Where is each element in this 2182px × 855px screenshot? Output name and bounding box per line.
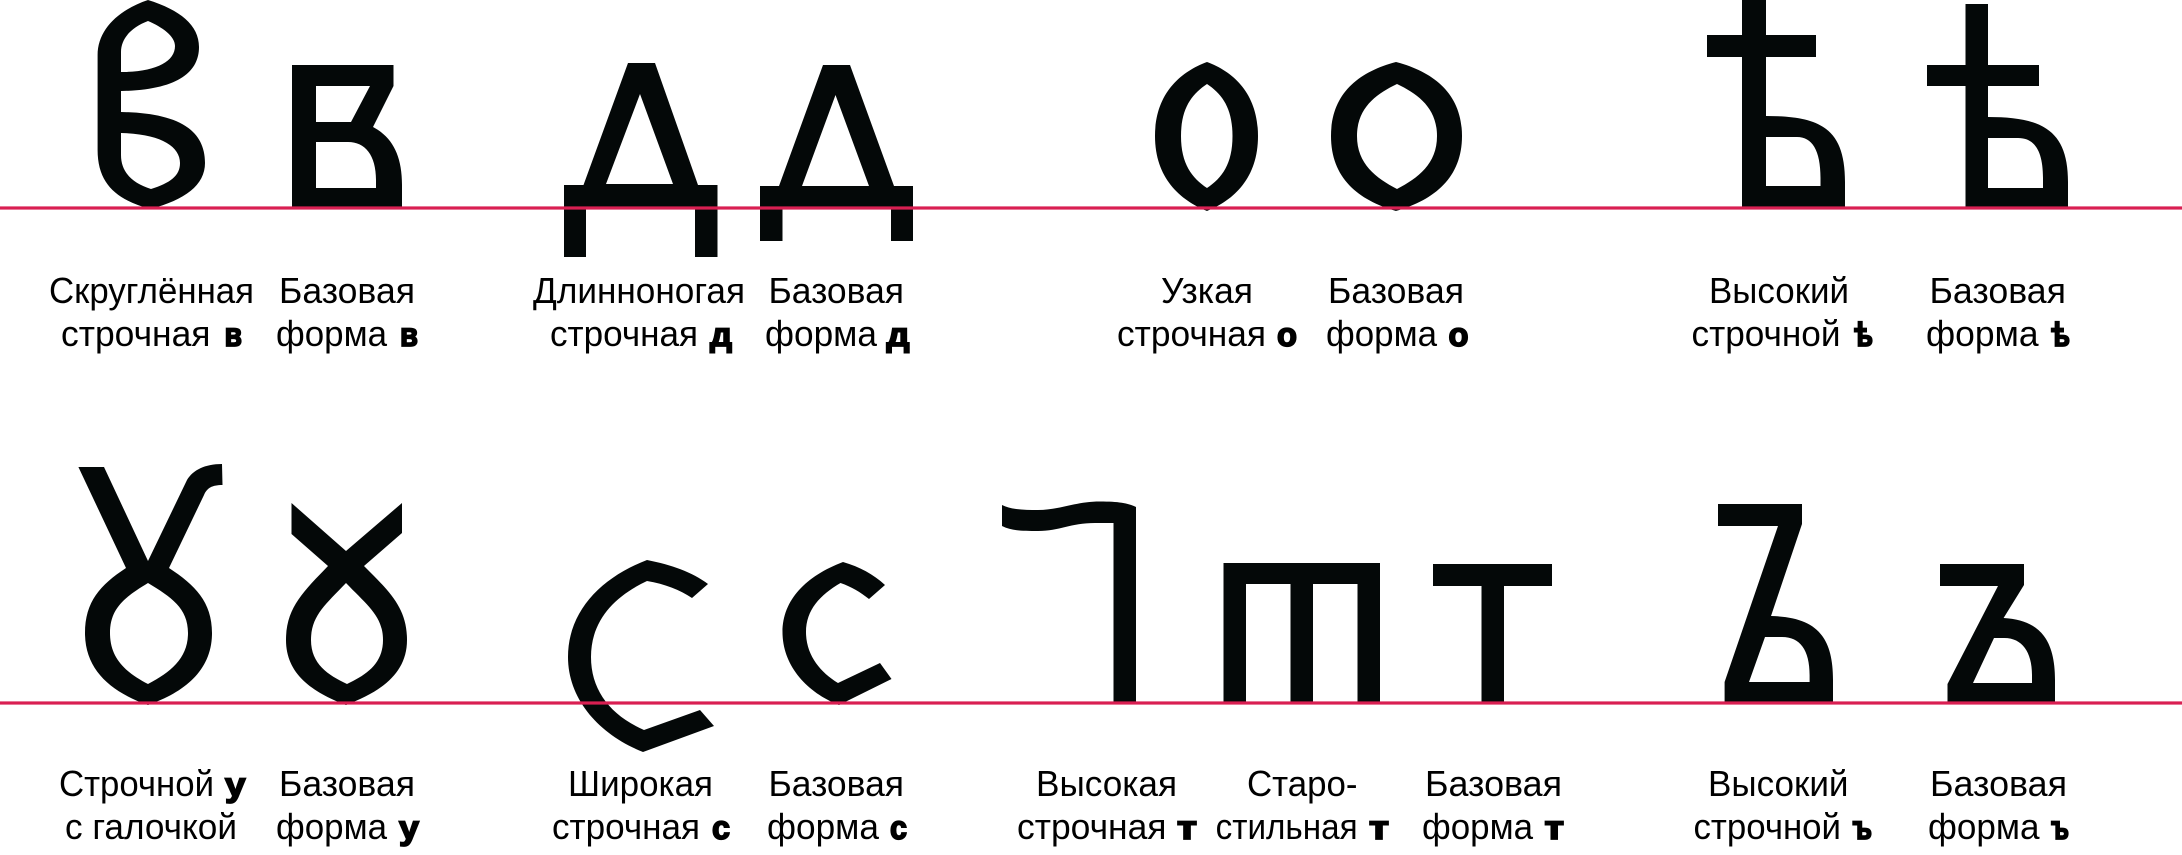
glyph: tall ъ: [1718, 504, 1833, 702]
caption: base ѣ: Базовая: [1930, 270, 2066, 311]
caption: base о: Базовая: [1328, 270, 1464, 311]
caption: tall ѣ: [1692, 270, 1873, 354]
caption: tall т: строчная: [1017, 806, 1166, 847]
glyph: tall ѣ: [1707, 0, 1845, 207]
panel: letter д: [533, 63, 913, 354]
caption: long-legged д: строчная: [550, 313, 698, 354]
glyph: rounded lowercase в: [98, 0, 205, 209]
caption: base с: форма: [767, 806, 880, 847]
caption: long-legged д: Длинноногая: [533, 270, 745, 311]
caption: base в: форма: [276, 313, 388, 354]
caption: old-style т: т: [1369, 809, 1389, 846]
glyph: base о: [1331, 62, 1462, 211]
caption: у with tick: Строчной: [59, 763, 214, 804]
caption: long-legged д: [533, 270, 745, 354]
caption: tall ъ: [1694, 763, 1872, 847]
glyph: base д: [760, 65, 913, 241]
caption: base с: Базовая: [768, 763, 904, 804]
caption: tall т: [1017, 763, 1197, 847]
caption: base ѣ: ѣ: [2051, 316, 2070, 353]
caption: wide с: Широкая: [568, 763, 713, 804]
glyph: base ѣ: [1927, 4, 2068, 207]
caption: tall т: т: [1177, 809, 1197, 846]
caption: wide с: строчная: [552, 806, 700, 847]
caption: tall ъ: Высокий: [1708, 763, 1848, 804]
caption: base ъ: Базовая: [1930, 763, 2067, 804]
caption: narrow о: Узкая: [1161, 270, 1253, 311]
glyph: tall т: [1002, 502, 1136, 702]
caption: old-style т: Старо-: [1247, 763, 1358, 804]
caption: base у: у: [399, 809, 420, 846]
caption: tall ъ: строчной: [1694, 806, 1841, 847]
caption: rounded в: в: [224, 316, 242, 353]
caption: wide с: с: [712, 809, 730, 846]
caption: base д: [765, 270, 910, 354]
caption: tall ѣ: строчной: [1692, 313, 1840, 354]
caption: base в: в: [400, 316, 418, 353]
caption: base о: [1326, 270, 1468, 354]
caption: base д: Базовая: [768, 270, 904, 311]
glyph: base в: [292, 65, 402, 207]
caption: narrow о: строчная: [1117, 313, 1266, 354]
caption: base в: Базовая: [279, 270, 415, 311]
caption: base ѣ: [1926, 270, 2070, 354]
caption: base ѣ: форма: [1926, 313, 2040, 354]
glyph: base ъ: [1940, 564, 2055, 702]
glyph: wide с: [568, 560, 714, 752]
caption: base т: т: [1544, 809, 1564, 846]
caption: base в: [276, 270, 418, 354]
glyph: narrow о: [1155, 62, 1258, 211]
glyph: old-style т: [1224, 563, 1380, 702]
glyph: base т: [1433, 564, 1552, 702]
caption: base д: д: [886, 316, 910, 353]
caption: old-style т: [1216, 763, 1389, 847]
glyph: base с: [782, 562, 892, 705]
caption: base у: [276, 763, 420, 847]
caption: base ъ: [1928, 763, 2069, 847]
caption: base с: с: [890, 809, 907, 846]
caption: base т: форма: [1422, 806, 1534, 847]
caption: old-style т: стильная: [1216, 806, 1358, 847]
panel: letter у: [59, 464, 420, 847]
panel: letter т: [1002, 502, 1564, 847]
caption: rounded в: строчная: [61, 313, 210, 354]
panel: letter о: [1117, 62, 1468, 354]
caption: base д: форма: [765, 313, 878, 354]
caption: rounded в: Скруглённая: [49, 270, 254, 311]
caption: tall ъ: ъ: [1852, 809, 1872, 846]
caption: rounded в: [49, 270, 254, 354]
caption: base о: о: [1448, 316, 1468, 353]
caption: tall т: Высокая: [1036, 763, 1177, 804]
caption: base т: Базовая: [1425, 763, 1562, 804]
caption: wide с: [552, 763, 730, 847]
panel: letter ъ: [1694, 504, 2069, 847]
panel: letter в: [49, 0, 418, 354]
caption: long-legged д: д: [710, 316, 732, 353]
caption: base у: Базовая: [279, 763, 415, 804]
caption: tall ѣ: Высокий: [1709, 270, 1849, 311]
caption: base ъ: форма: [1928, 806, 2040, 847]
caption: base у: форма: [276, 806, 388, 847]
panel: letter ѣ: [1692, 0, 2070, 354]
caption: у with tick: у: [225, 766, 246, 803]
caption: base о: форма: [1326, 313, 1438, 354]
panel: letter с: [552, 560, 907, 847]
caption: tall ѣ: ѣ: [1854, 316, 1873, 353]
baseline: top row: [0, 206, 2182, 210]
caption: у with tick: с галочкой: [65, 806, 237, 847]
caption: base с: [767, 763, 907, 847]
baseline: bottom row: [0, 701, 2182, 705]
caption: narrow о: о: [1277, 316, 1297, 353]
caption: base т: [1422, 763, 1564, 847]
glyph: long-legged д: [564, 63, 718, 257]
glyph: у with tick: [78, 464, 223, 705]
caption: у with tick: [59, 763, 246, 847]
caption: narrow о: [1117, 270, 1297, 354]
glyph: base у: [286, 503, 407, 705]
caption: base ъ: ъ: [2051, 809, 2069, 846]
